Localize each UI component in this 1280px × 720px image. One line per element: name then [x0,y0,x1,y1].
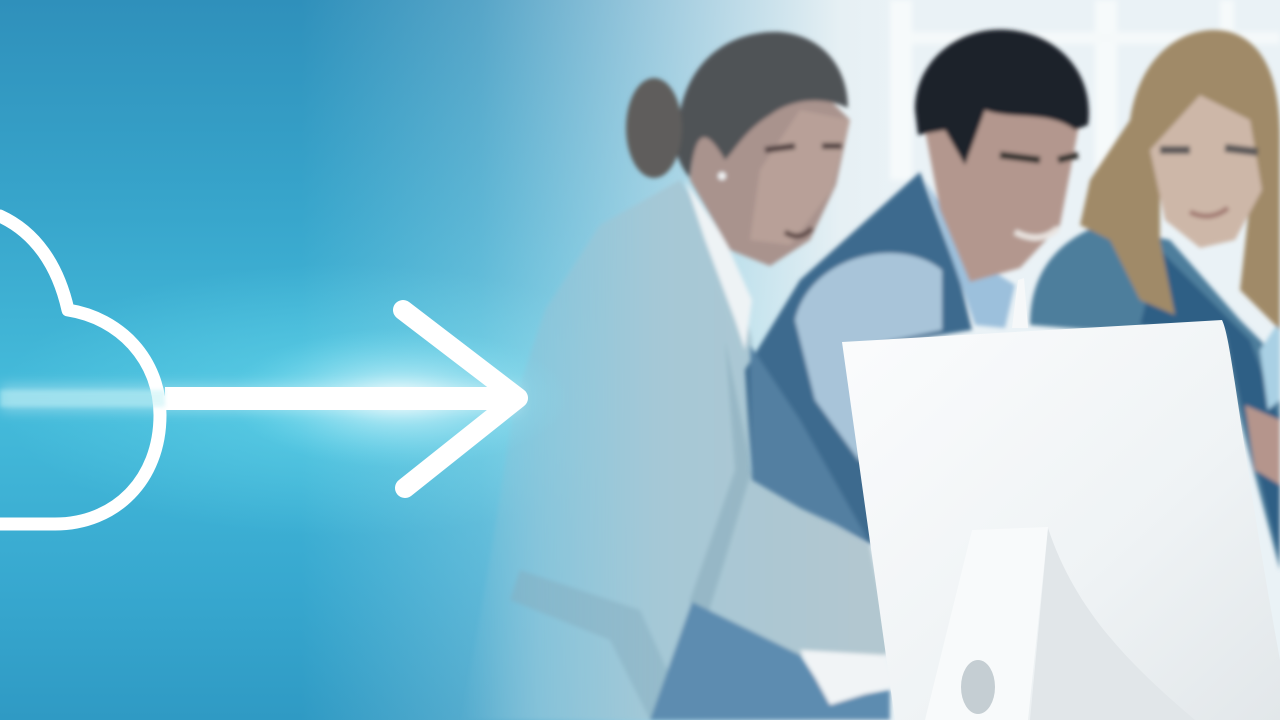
light glow [230,328,570,468]
arrow shaft [165,387,510,410]
monitor stand shadow [1030,528,1195,720]
monitor [842,278,1280,720]
hand [1245,405,1280,485]
monitor stand hole [961,660,995,714]
hair bun [626,78,682,178]
desk cable [1012,278,1028,328]
jacket shading [510,570,690,720]
blue skirt area [650,602,890,720]
person: woman in grey jacket [462,32,895,720]
eyes and mouth [765,146,842,150]
eyes and lips [1160,148,1258,152]
sleeve [795,253,942,462]
cloud outline [0,216,160,524]
top [1030,225,1280,570]
monitor back [842,320,1280,720]
monitor stand front [925,527,1048,720]
person: man in vest [745,30,1089,545]
hair [675,32,848,178]
earring [718,172,726,180]
person: blonde woman [1030,30,1280,570]
brows and smile [1000,155,1078,160]
blouse collar [685,180,752,350]
forearm cuff [800,650,895,705]
vest [745,172,972,545]
face [1150,95,1262,248]
neck and face [690,90,850,266]
cloud arrow icon [0,216,570,524]
jacket [462,180,890,720]
neck and face [925,80,1080,282]
arrow head [403,310,518,488]
hair [915,30,1089,165]
long hair [1080,30,1280,330]
office window [890,0,1280,180]
collar [925,180,1015,328]
